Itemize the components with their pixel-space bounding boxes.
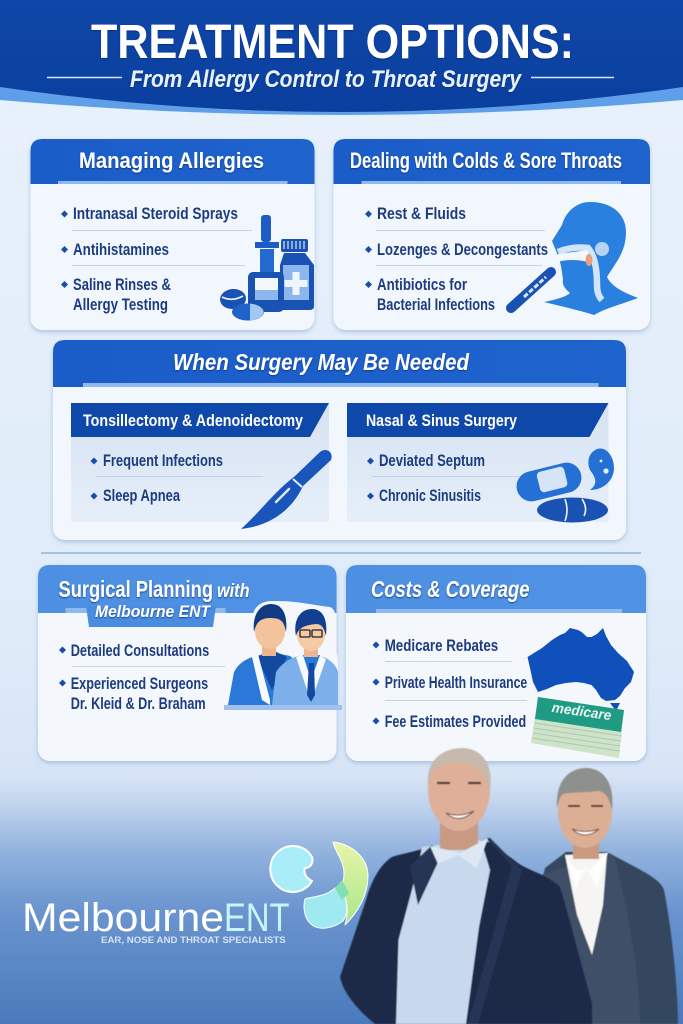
list: Dr. Kleid & Dr. Braham	[71, 695, 206, 713]
icon: scalpel	[241, 450, 332, 529]
panel: managing allergies	[30, 139, 314, 330]
heading: When Surgery May Be Needed	[173, 349, 470, 375]
logo: Melbourne ENT	[22, 842, 368, 945]
sub-panel: nasal and sinus surgery: Chronic Sinusitis	[379, 487, 481, 505]
wordmark: Melbourne	[22, 896, 224, 940]
page background	[0, 0, 683, 780]
list: Detailed Consultations	[71, 642, 209, 660]
list: Antihistamines	[73, 241, 169, 259]
photo: lead surgeon	[340, 748, 592, 1024]
icon: two doctors	[224, 601, 342, 710]
list	[372, 637, 527, 731]
footer background	[0, 775, 683, 1024]
list: Medicare Rebates	[385, 637, 498, 655]
list	[59, 642, 225, 713]
list	[61, 205, 252, 314]
subtitle: From Allergy Control to Throat Surgery	[130, 66, 522, 93]
list: Bacterial Infections	[377, 296, 495, 314]
sub-heading: Tonsillectomy & Adenoidectomy	[83, 411, 303, 430]
panel: surgical planning: with	[217, 581, 250, 602]
panel: when surgery may be needed	[53, 340, 626, 540]
sub-panel: tonsillectomy: Frequent Infections	[103, 452, 223, 470]
list	[365, 205, 548, 314]
icon: medicine bottles and pills	[219, 215, 314, 320]
sub-panel: tonsillectomy: Sleep Apnea	[103, 487, 181, 505]
icon: medicare card	[531, 697, 624, 758]
sub-heading: Nasal & Sinus Surgery	[366, 411, 517, 430]
panel: costs and coverage	[346, 565, 646, 761]
list: Intranasal Steroid Sprays	[73, 205, 238, 223]
icon: thermometer	[511, 272, 551, 308]
panel: surgical planning	[38, 565, 342, 761]
list: Experienced Surgeons	[71, 675, 208, 693]
list: Antibiotics for	[377, 276, 467, 294]
heading: Managing Allergies	[79, 148, 264, 173]
list: Allergy Testing	[73, 296, 168, 314]
card label: medicare	[551, 699, 613, 723]
list: Fee Estimates Provided	[385, 713, 526, 731]
list: Private Health Insurance	[385, 674, 527, 692]
list: Lozenges & Decongestants	[377, 241, 548, 259]
list: Rest & Fluids	[377, 205, 466, 223]
icon: map of Australia	[528, 628, 634, 711]
photo: second surgeon	[538, 768, 678, 1024]
list: Saline Rinses &	[73, 276, 171, 294]
sub-panel: nasal and sinus surgery: Deviated Septum	[379, 452, 485, 470]
heading ribbon	[86, 606, 216, 627]
panel: surgical planning: Melbourne ENT	[95, 602, 211, 621]
icon: capsules	[513, 448, 614, 522]
icon: head and throat	[544, 202, 638, 315]
sub-panel: tonsillectomy	[71, 403, 332, 529]
title: TREATMENT OPTIONS:	[91, 16, 574, 69]
header banner	[0, 0, 683, 115]
logo: Melbourne ENT: ENT	[224, 896, 290, 940]
logo mark	[270, 842, 368, 928]
tagline: EAR, NOSE AND THROAT SPECIALISTS	[101, 935, 286, 945]
panel: colds and sore throats	[334, 139, 650, 330]
sub-panel: nasal and sinus surgery	[347, 403, 614, 522]
heading: Surgical Planning	[58, 576, 213, 602]
heading: Costs & Coverage	[371, 576, 530, 602]
